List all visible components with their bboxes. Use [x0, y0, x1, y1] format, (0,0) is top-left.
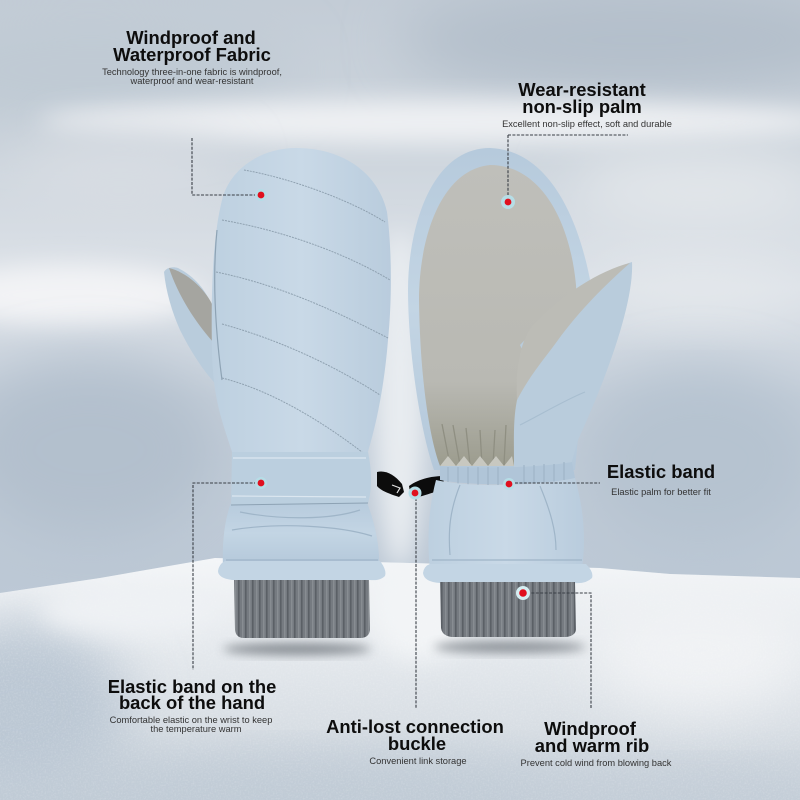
- mitten shell: [212, 148, 391, 458]
- palm gathers: [440, 424, 514, 466]
- callout: elastic band: Elastic band: [607, 461, 715, 482]
- callout: windproof and waterproof fabric: Windproof and: [126, 27, 256, 48]
- callout: wear-resistant non-slip palm: Excellent non-slip effect, soft and durable: [502, 119, 672, 129]
- callout: anti-lost connection buckle: [326, 716, 504, 766]
- callout lines: [192, 135, 628, 708]
- callout: windproof and warm rib: Windproof: [544, 718, 637, 739]
- shell: [408, 148, 592, 470]
- callout: elastic band on back of hand: Elastic band on the: [108, 676, 276, 697]
- callout: windproof and waterproof fabric: Technology three-in-one fabric is windproof,: [102, 67, 282, 77]
- knit rib: [234, 580, 370, 638]
- cuff roll: [423, 564, 592, 583]
- palm patch: [419, 165, 576, 466]
- hotspot markers: [255, 189, 530, 600]
- lower cuff: [223, 500, 379, 566]
- callout: elastic band on back of hand: Comfortable elastic on the wrist to keep: [110, 715, 272, 725]
- callout: elastic band on back of hand: [108, 676, 276, 734]
- thumb: [514, 262, 632, 468]
- cuff roll: [218, 561, 385, 580]
- callout: windproof and warm rib: and warm rib: [535, 735, 649, 756]
- lower cuff: [428, 478, 584, 568]
- callout: windproof and waterproof fabric: [102, 27, 282, 86]
- callout: anti-lost connection buckle: buckle: [388, 733, 446, 754]
- callout: wear-resistant non-slip palm: non-slip palm: [522, 96, 642, 117]
- gather band: [440, 462, 575, 485]
- right mitten (palm view): [408, 148, 632, 637]
- callout: elastic band: Elastic palm for better fit: [611, 487, 711, 497]
- knit rib: [440, 582, 576, 637]
- left mitten (back view): [164, 148, 391, 638]
- callout: windproof and warm rib: Prevent cold wind from blowing back: [521, 758, 672, 768]
- snow mound: [0, 555, 800, 800]
- callout: windproof and waterproof fabric: Waterproof Fabric: [113, 44, 271, 65]
- callout: wear-resistant non-slip palm: [502, 79, 672, 129]
- callout: elastic band on back of hand: back of the hand: [119, 692, 265, 713]
- buckle: black clips: [377, 472, 444, 498]
- callout: elastic band: [607, 461, 715, 497]
- callout: anti-lost connection buckle: Convenient link storage: [369, 756, 467, 766]
- velcro strap: [231, 452, 371, 505]
- callout: anti-lost connection buckle: Anti-lost connection: [326, 716, 504, 737]
- callout: windproof and waterproof fabric: waterproof and wear-resistant: [130, 76, 254, 86]
- callout: elastic band on back of hand: the temperature warm: [151, 724, 242, 734]
- callout: wear-resistant non-slip palm: Wear-resistant: [518, 79, 646, 100]
- thumb: [164, 267, 222, 390]
- callout: windproof and warm rib: [521, 718, 672, 768]
- quilt stitching: [215, 170, 390, 452]
- glove shadows: [223, 641, 586, 655]
